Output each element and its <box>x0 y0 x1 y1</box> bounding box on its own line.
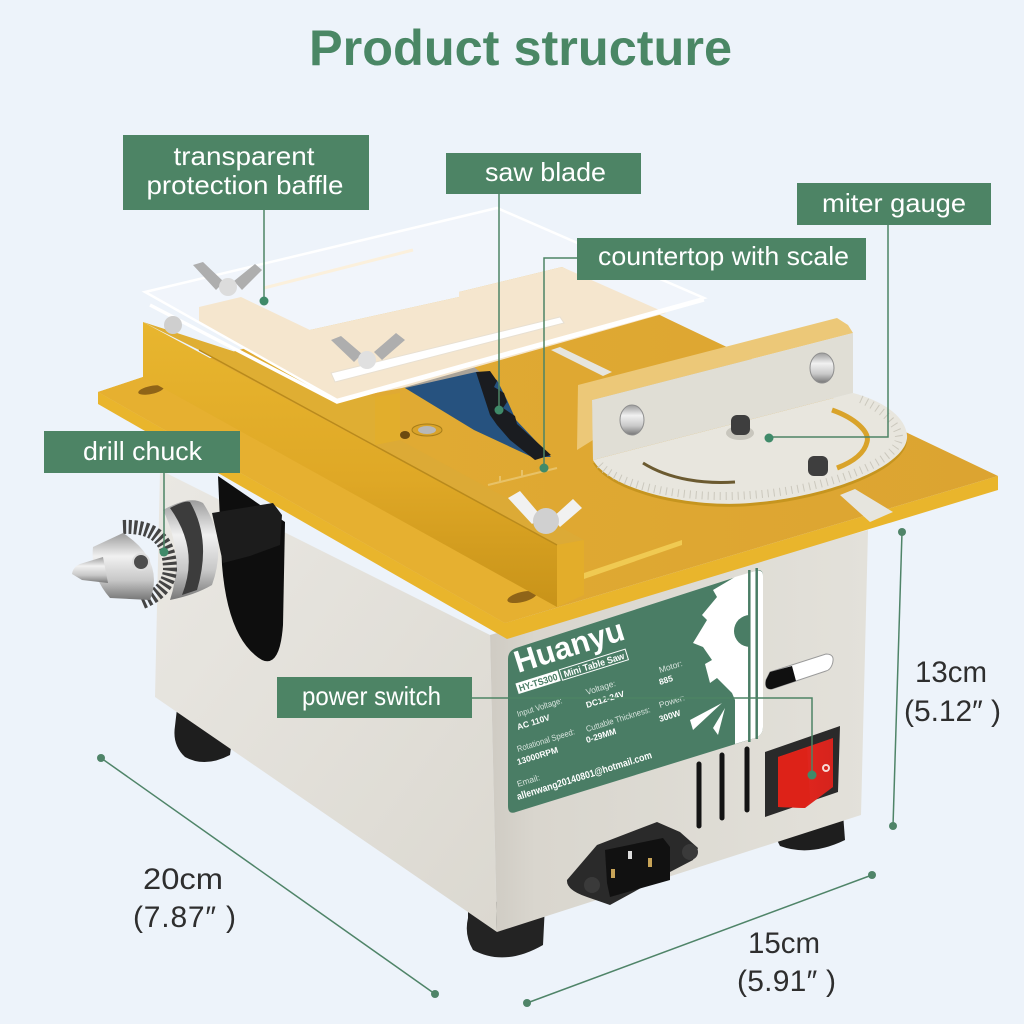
ruler marks on table <box>488 468 557 485</box>
callout: countertop with scale <box>540 238 866 472</box>
plate saw graphic <box>690 571 763 744</box>
long fence bar <box>143 322 584 607</box>
callout: countertop with scale: countertop with scale <box>598 241 849 271</box>
name plate: Mini Table Saw <box>562 651 626 680</box>
callout: drill chuck: drill chuck <box>83 436 203 466</box>
product: mini table saw <box>72 208 998 957</box>
callout: drill chuck <box>44 431 240 556</box>
callout: transparent protection baffle: transparent <box>174 141 315 171</box>
wing nut <box>508 491 582 534</box>
front left plate tint <box>98 377 557 623</box>
drill chuck <box>72 500 282 603</box>
vent slots <box>699 749 747 826</box>
left body face <box>155 470 497 932</box>
saw blade <box>405 371 551 460</box>
callout: transparent protection baffle: protection baffle <box>146 170 344 200</box>
table slots <box>137 383 682 605</box>
callout: transparent protection baffle <box>123 135 369 306</box>
callout: saw blade: saw blade <box>485 157 606 187</box>
name plate: 0-29MM <box>585 726 617 745</box>
dimension text: 13cm: 13cm <box>915 656 987 689</box>
name plate: AC 110V <box>516 712 551 732</box>
table plate top <box>98 267 998 623</box>
dimension text: 20cm: (7.87″ ) <box>133 901 236 934</box>
dimension text: 15cm: 15cm <box>748 927 820 960</box>
dimension line: width <box>523 871 876 1007</box>
callout: miter gauge <box>764 183 991 442</box>
name plate: HY-TS300 <box>518 672 559 694</box>
name plate: DC12-24V <box>585 688 626 710</box>
steel ruler strips <box>551 347 893 522</box>
blade slot screw <box>400 424 442 439</box>
power socket <box>567 822 698 905</box>
name plate: allenwang20140801@hotmail.com <box>516 750 654 803</box>
right body face <box>490 530 868 932</box>
slide switch <box>766 654 833 689</box>
rocker power switch <box>765 726 840 817</box>
callout: power switch: power switch <box>302 681 441 711</box>
dimension text: 20cm: 20cm <box>143 863 223 896</box>
title: Product structure <box>309 20 732 76</box>
callout: power switch <box>277 677 816 780</box>
name plate: Cuttable Thickness: <box>585 704 652 734</box>
plate text: Huanyu <box>510 612 629 680</box>
name plate: 300W <box>658 707 683 724</box>
name plate: Email: <box>516 772 541 789</box>
dimension text: 20cm <box>133 863 236 934</box>
name plate <box>508 568 763 813</box>
acrylic protection baffle <box>145 208 704 402</box>
miter gauge protractor <box>592 333 907 507</box>
wing nut rear screw <box>164 316 182 334</box>
dimension text: 15cm: (5.91″ ) <box>737 965 836 998</box>
saw blade seen through acrylic <box>396 323 480 388</box>
rubber feet <box>174 700 845 957</box>
dimension text: 13cm: (5.12″ ) <box>904 695 1001 728</box>
table plate edge <box>98 392 998 639</box>
name plate: 885 <box>658 673 674 687</box>
name plate: Voltage: <box>585 678 617 697</box>
name plate: Power: <box>658 692 686 710</box>
dimension line: depth <box>97 754 439 998</box>
callout: miter gauge: miter gauge <box>822 188 966 218</box>
dimension text: 15cm <box>737 927 836 998</box>
name plate: 13000RPM <box>516 745 559 767</box>
wing nut <box>193 262 262 296</box>
name plate: Rotational Speed: <box>516 726 576 754</box>
name plate: Motor: <box>658 658 684 675</box>
dimension text: 13cm <box>904 656 1001 728</box>
callout: saw blade <box>446 153 641 414</box>
side opening <box>218 476 285 661</box>
dimension line: height <box>889 528 906 830</box>
name plate: Input Voltage: <box>516 695 563 719</box>
wing nut <box>331 333 405 369</box>
gauge acrylic strip <box>577 318 853 450</box>
